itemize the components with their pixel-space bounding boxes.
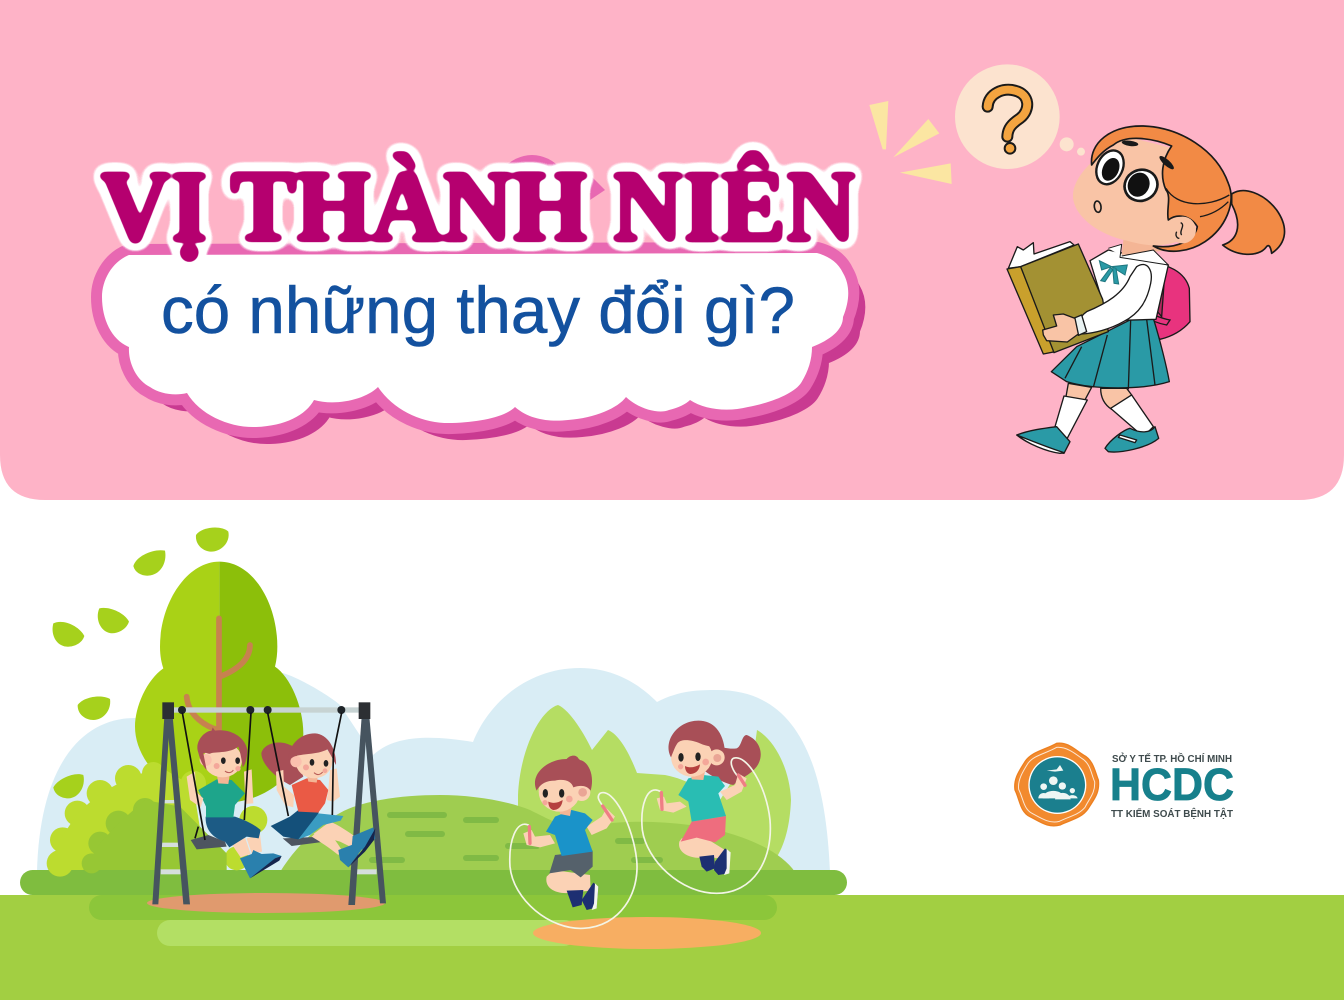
book xyxy=(1007,242,1108,354)
boy shirt xyxy=(198,779,245,817)
bush light xyxy=(47,762,267,877)
shirt and collar xyxy=(1090,240,1168,321)
boy shoes xyxy=(240,850,282,878)
girl shoes xyxy=(352,827,375,850)
ponytail xyxy=(1223,191,1285,254)
light green mountains xyxy=(518,705,791,872)
title group: cloud, heading and subtitle xyxy=(100,150,862,441)
boy shirt xyxy=(546,810,593,856)
girl legs xyxy=(679,837,724,858)
boy head xyxy=(559,807,572,816)
skirt xyxy=(1051,318,1169,389)
logo text: agency: SỞ Y TẾ TP. HỒ CHÍ MINH xyxy=(1112,752,1232,765)
boy arms xyxy=(523,808,615,847)
girl skirt xyxy=(271,810,319,839)
rope handles xyxy=(529,775,745,843)
character: jumping boy xyxy=(523,756,615,910)
header panel: pink background xyxy=(0,0,1344,500)
logo text: HCDC: HCDC xyxy=(1110,759,1234,810)
girl hair back xyxy=(261,742,303,785)
jumping rope children xyxy=(510,721,770,928)
girl seat xyxy=(283,837,325,846)
backpack xyxy=(1138,263,1190,339)
brown patch xyxy=(147,893,385,913)
girl head xyxy=(288,733,336,783)
tree crown xyxy=(135,562,303,803)
girl ropes xyxy=(268,713,342,816)
subtitle: có những thay đổi gì?: có những thay đổi gì? xyxy=(161,273,795,347)
girl shoes xyxy=(699,855,715,872)
boy head xyxy=(197,727,247,784)
boy shorts xyxy=(206,817,261,847)
girl arms xyxy=(657,773,747,813)
logo text: centre name: TT KIỂM SOÁT BỆNH TẬT xyxy=(1111,807,1234,820)
ground band middle xyxy=(89,895,777,920)
character: boy on swing xyxy=(182,713,282,878)
boy seat xyxy=(191,835,227,849)
boy shorts xyxy=(549,851,593,877)
swing frame xyxy=(152,702,386,905)
character: girl reading a book with question bubble xyxy=(869,64,1285,453)
boy legs xyxy=(230,834,262,857)
boy arms xyxy=(187,769,253,807)
orange patch xyxy=(533,917,761,949)
character: jumping girl xyxy=(657,721,761,875)
logo: HCDC xyxy=(1015,743,1234,826)
girl head xyxy=(691,772,705,780)
sky hills xyxy=(37,668,830,872)
girl legs xyxy=(313,822,356,847)
hair xyxy=(1091,126,1231,251)
icon: thought bubble with question mark xyxy=(955,64,1085,169)
ground band light xyxy=(157,920,577,946)
girl arms xyxy=(276,768,340,807)
girl shirt xyxy=(678,775,726,822)
ear xyxy=(1169,217,1196,243)
girl hair back xyxy=(700,735,761,785)
ground band dark xyxy=(20,870,847,895)
character: girl on swing xyxy=(261,713,375,867)
bow xyxy=(1099,261,1127,284)
boy shoes xyxy=(567,890,583,907)
logo emblem xyxy=(1015,743,1099,826)
legs and socks xyxy=(1017,383,1159,453)
ground xyxy=(0,895,1344,1000)
girl shorts xyxy=(681,816,726,842)
eyes, brows and mouth xyxy=(1091,140,1176,213)
scene: park background xyxy=(0,668,1344,1000)
icon: sun rays xyxy=(869,101,952,184)
tree, bushes and swing set xyxy=(47,528,386,905)
face xyxy=(1073,137,1193,245)
green hills xyxy=(280,795,795,872)
bush dark xyxy=(82,798,227,873)
boy legs xyxy=(546,870,591,893)
cloud badge xyxy=(102,155,862,441)
jump ropes xyxy=(510,758,770,928)
girl shirt xyxy=(292,778,328,813)
boy ropes xyxy=(182,713,251,840)
falling leaves xyxy=(53,528,229,798)
hill grass marks xyxy=(369,812,663,863)
arm and hand xyxy=(1043,265,1151,342)
heading: VỊ THÀNH NIÊN: VỊ THÀNH NIÊN xyxy=(100,150,856,262)
